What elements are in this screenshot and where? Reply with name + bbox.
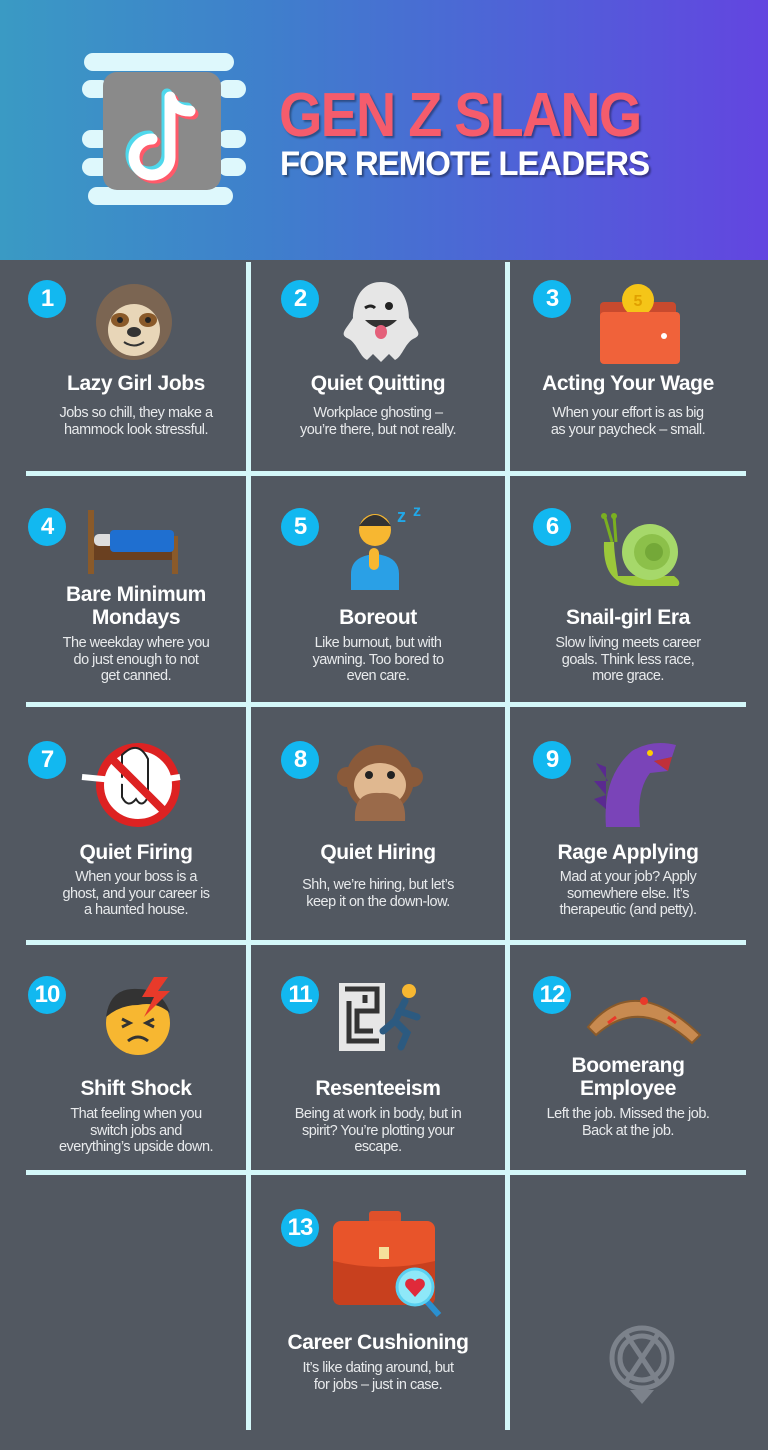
panel: 3 Acting Your Wage: When your effort is as big (552, 405, 704, 421)
panel: 4 Bare Minimum Mondays: The weekday where you (63, 635, 209, 651)
panel: 4 Bare Minimum Mondays: Bare Minimum (66, 583, 206, 606)
icon: wallet with coin (600, 284, 680, 364)
panel: 8 Quiet Hiring: 8 (294, 746, 306, 773)
icon: dragon (594, 743, 676, 827)
panel: 4 Bare Minimum Mondays (28, 508, 209, 684)
panel: 13 Career Cushioning: for jobs – just in case. (314, 1376, 442, 1392)
panel: 6 Snail-girl Era (533, 508, 701, 684)
panel: 6 Snail-girl Era: 6 (546, 513, 558, 540)
panel: 13 Career Cushioning: 13 (288, 1214, 312, 1241)
icon: no-ghost sign (82, 743, 180, 827)
panel: 9 Rage Applying: Rage Applying (557, 841, 699, 864)
panel: 2 Quiet Quitting: you’re there, but not really. (300, 422, 456, 438)
subtitle: FOR REMOTE LEADERS (280, 145, 649, 183)
panel: 1 Lazy Girl Jobs: Jobs so chill, they make a (59, 405, 213, 421)
panel: 13 Career Cushioning: Career Cushioning (287, 1331, 469, 1354)
panel: 10 Shift Shock: everything’s upside down. (59, 1139, 213, 1155)
panel: 5 Boreout: yawning. Too bored to (312, 652, 444, 668)
panel: 7 Quiet Firing: a haunted house. (84, 902, 188, 918)
panel: 2 Quiet Quitting: Workplace ghosting – (313, 405, 443, 421)
panel: 4 Bare Minimum Mondays: get canned. (101, 668, 171, 684)
panel: 6 Snail-girl Era: Snail-girl Era (566, 606, 690, 629)
panel: 5 Boreout: Boreout (339, 606, 417, 629)
panel: 6 Snail-girl Era: more grace. (592, 668, 664, 684)
panel: 10 Shift Shock (28, 976, 213, 1155)
icon: speak-no-evil monkey (337, 745, 423, 821)
panel: 3 Acting Your Wage: Acting Your Wage (542, 372, 714, 395)
panel: 9 Rage Applying: therapeutic (and petty). (559, 902, 697, 918)
panel: 1 Lazy Girl Jobs: 1 (41, 285, 53, 312)
icon: shocked face (106, 977, 170, 1055)
panel: 13 Career Cushioning: It’s like dating around, but (302, 1360, 453, 1376)
panel: 7 Quiet Firing: ghost, and your career is (62, 886, 210, 902)
panel: 11 Resenteeism: Resenteeism (315, 1077, 441, 1100)
panel: 6 Snail-girl Era: goals. Think less race, (562, 652, 694, 668)
panel: 12 Boomerang Employee: 12 (540, 981, 564, 1008)
icon: sleepy person (351, 504, 421, 590)
panel: 12 Boomerang Employee (533, 976, 709, 1138)
icon: bed (88, 510, 178, 574)
panel: 11 Resenteeism: spirit? You’re plotting your (302, 1122, 454, 1138)
panel: 4 Bare Minimum Mondays: do just enough to not (74, 652, 198, 668)
panel: 1 Lazy Girl Jobs: hammock look stressful. (64, 422, 208, 438)
panel: 6 Snail-girl Era: Slow living meets career (555, 635, 701, 651)
panel: 8 Quiet Hiring: Shh, we’re hiring, but let’s (302, 877, 454, 893)
panel: 8 Quiet Hiring (281, 741, 454, 910)
panel: 3 Acting Your Wage: 3 (546, 285, 558, 312)
panel: 11 Resenteeism (281, 976, 461, 1155)
panel: 7 Quiet Firing: Quiet Firing (79, 841, 193, 864)
panel: 7 Quiet Firing: When your boss is a (75, 869, 197, 885)
panel: 5 Boreout: Like burnout, but with (315, 635, 441, 651)
panel: 9 Rage Applying (533, 741, 699, 918)
icon: sleepy person: z (397, 506, 406, 526)
panel: 11 Resenteeism: 11 (288, 981, 312, 1008)
panel: 5 Boreout: even care. (347, 668, 409, 684)
panel: 9 Rage Applying: somewhere else. It’s (567, 886, 689, 902)
panel: 10 Shift Shock: switch jobs and (90, 1122, 182, 1138)
panel: 5 Boreout: 5 (294, 513, 306, 540)
icon: ghost (344, 282, 418, 362)
panel: 7 Quiet Firing (28, 741, 210, 918)
icon: brand logo (610, 1326, 674, 1404)
title: GEN Z SLANG (279, 81, 641, 150)
panel: 13 Career Cushioning (281, 1209, 469, 1392)
panel: 12 Boomerang Employee: Boomerang (571, 1054, 685, 1077)
panel: 3 Acting Your Wage: as your paycheck – small. (551, 422, 705, 438)
panel: 7 Quiet Firing: 7 (41, 746, 53, 773)
panel: 1 Lazy Girl Jobs (28, 280, 214, 438)
header banner (0, 0, 768, 260)
panel: 9 Rage Applying: 9 (546, 746, 558, 773)
panel: 2 Quiet Quitting (281, 280, 456, 438)
panel: 12 Boomerang Employee: Left the job. Missed the job. (547, 1106, 709, 1122)
panel: 2 Quiet Quitting: Quiet Quitting (311, 372, 445, 395)
icon: snail (601, 513, 680, 586)
panel: 2 Quiet Quitting: 2 (294, 285, 306, 312)
panel: 9 Rage Applying: Mad at your job? Apply (560, 869, 696, 885)
panel: 4 Bare Minimum Mondays: Mondays (92, 606, 180, 629)
panel: 11 Resenteeism: Being at work in body, but in (295, 1106, 461, 1122)
icon: sloth (96, 284, 172, 360)
panel: 3 Acting Your Wage (533, 280, 714, 438)
icon: boomerang (586, 997, 702, 1044)
panel: 10 Shift Shock: Shift Shock (80, 1077, 192, 1100)
panel: 8 Quiet Hiring: keep it on the down-low. (306, 894, 450, 910)
panel: 10 Shift Shock: That feeling when you (70, 1106, 202, 1122)
panel: 12 Boomerang Employee: Back at the job. (582, 1122, 674, 1138)
panel: 12 Boomerang Employee: Employee (580, 1077, 676, 1100)
icon: briefcase with magnifier (333, 1211, 442, 1317)
panel: 5 Boreout (281, 504, 444, 684)
icon: tiktok logo (82, 53, 246, 205)
panel: 4 Bare Minimum Mondays: 4 (41, 513, 53, 540)
panel: 11 Resenteeism: escape. (354, 1139, 402, 1155)
panel: 10 Shift Shock: 10 (35, 981, 59, 1008)
icon: person escaping maze (339, 983, 420, 1051)
panel: 8 Quiet Hiring: Quiet Hiring (320, 841, 436, 864)
icon: wallet with coin: 5 (634, 293, 643, 310)
panel: 1 Lazy Girl Jobs: Lazy Girl Jobs (67, 372, 205, 395)
